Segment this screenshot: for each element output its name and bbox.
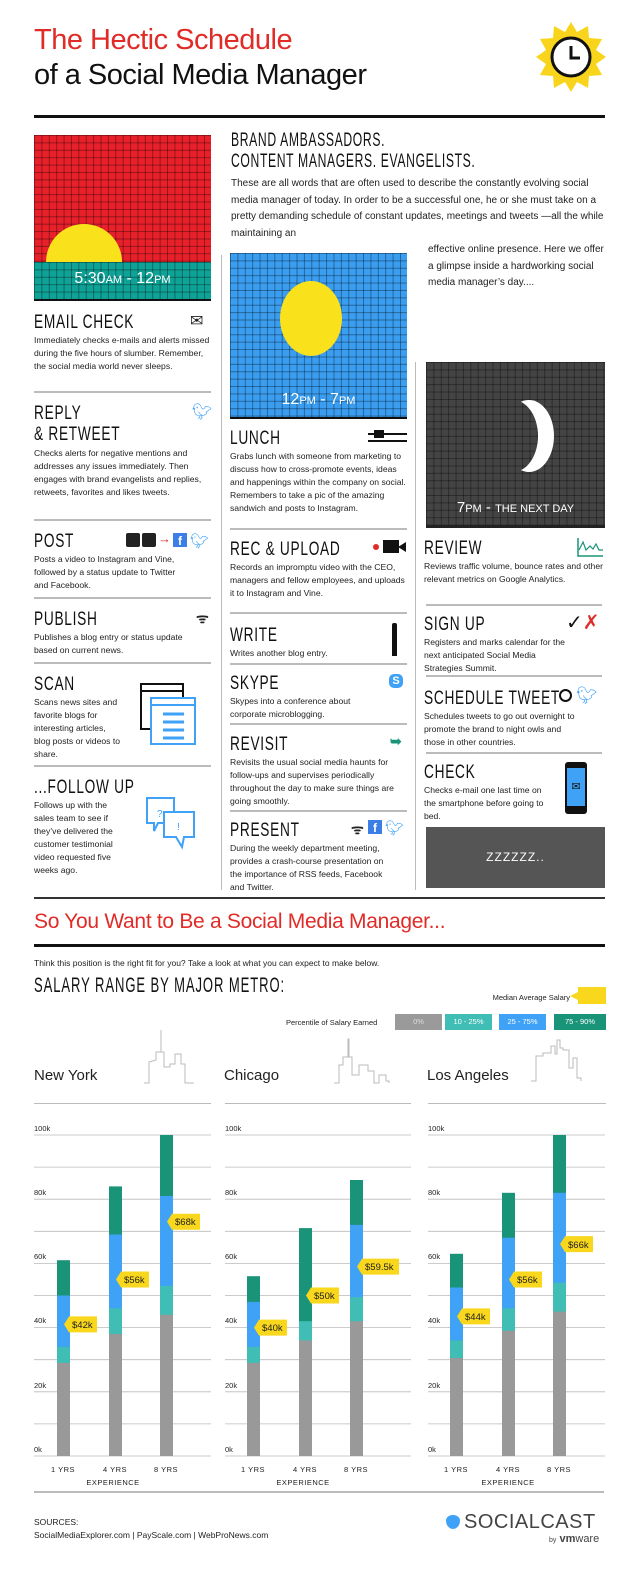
bar charts: 8 YRS	[344, 1465, 368, 1474]
icon: speech bubbles: ?	[157, 809, 163, 820]
item: review	[424, 538, 603, 584]
item: write: Writes another blog entry.	[230, 648, 328, 658]
item: post	[34, 531, 209, 590]
bar charts: 40k	[428, 1316, 440, 1325]
item: schedule tweet: SCHEDULE TWEET	[424, 688, 560, 709]
item: sign up: ✓✗	[566, 612, 600, 634]
item: check: Checks e-mail one last time on the smartphone before going to bed.	[424, 785, 543, 821]
sources	[34, 1517, 268, 1540]
item: follow up: Follows up with the sales team to see if they’ve delivered the customer testimonial video requested five weeks ago.	[34, 800, 113, 875]
bar charts: 0k	[428, 1445, 436, 1454]
item: email check: ✉	[190, 313, 203, 330]
Chicago bars	[247, 1180, 363, 1456]
item: rec & upload: Records an impromptu video with the CEO, managers and fellow employees, and uploads it to Instagram and Vine.	[230, 562, 405, 598]
item: review: Reviews traffic volume, bounce rates and other relevant metrics on Google Analytics.	[424, 561, 603, 584]
item: skype: Skypes into a conference about corporate microblogging.	[230, 696, 350, 719]
bar charts: EXPERIENCE	[276, 1478, 330, 1487]
item: rec & upload: REC & UPLOAD	[230, 539, 341, 560]
panel: morning: 5:30AM - 12PM	[74, 270, 171, 287]
item: email check	[34, 312, 209, 371]
bar charts: 40k	[34, 1316, 46, 1325]
item: reply & retweet: 🐦︎	[192, 404, 212, 421]
bar charts: 1 YRS	[444, 1465, 468, 1474]
panel: night: 7PM - THE NEXT DAY	[457, 499, 574, 516]
bar charts: 20k	[225, 1381, 237, 1390]
item: schedule tweet	[424, 686, 598, 747]
item: check	[424, 762, 587, 821]
text: effective online presence. Here we offer a glimpse inside a hardworking social media manager’s day....	[428, 244, 604, 288]
item: skype	[230, 673, 403, 719]
bar charts: EXPERIENCE	[86, 1478, 140, 1487]
bar charts: 4 YRS	[496, 1465, 520, 1474]
item: publish: PUBLISH	[34, 609, 98, 630]
item: follow up: ...FOLLOW UP	[34, 777, 135, 798]
section title: So You Want to Be a Social Media Manager...	[34, 910, 445, 933]
bar charts: 60k	[34, 1252, 46, 1261]
icon: speech bubbles: !	[177, 822, 180, 833]
bar charts	[34, 1124, 605, 1493]
bar charts: 4 YRS	[103, 1465, 127, 1474]
legend: 10 - 25%	[453, 1017, 484, 1026]
title	[34, 24, 367, 91]
panel: morning	[34, 135, 211, 301]
bar charts: 40k	[225, 1316, 237, 1325]
intro text: These are all words that are often used to describe the constantly evolving social media manager of today. In order to be a successful one, he or she must take on a pretty demanding schedule of constant updates, meetings and tweets —all the while maintaining an	[231, 178, 603, 238]
bar charts: 80k	[428, 1188, 440, 1197]
item: publish: ᯤ	[196, 610, 209, 626]
bar charts: 1 YRS	[51, 1465, 75, 1474]
item: skype: S	[392, 675, 400, 687]
bar charts: $68k	[175, 1217, 196, 1228]
logo: socialcast: by vmware	[549, 1533, 599, 1545]
bar charts: $56k	[517, 1275, 538, 1286]
city headers: New York	[34, 1067, 97, 1084]
legend: Percentile of Salary Earned	[286, 1018, 377, 1027]
bar charts: 20k	[428, 1381, 440, 1390]
title: The Hectic Schedule	[34, 24, 292, 56]
median labels	[64, 1214, 593, 1336]
sources: SocialMediaExplorer.com | PayScale.com | WebProNews.com	[34, 1530, 268, 1540]
item: revisit	[230, 733, 402, 806]
bar charts: 0k	[34, 1445, 42, 1454]
item: post: Posts a video to Instagram and Vine, followed by a status update to Twitter and Facebook.	[34, 554, 175, 590]
bar charts: 0k	[225, 1445, 233, 1454]
item: lunch: Grabs lunch with someone from marketing to discuss how to cross-promote events, ideas and happenings within the company on social. Remembers to take a pic of the amazing sandwich and posts to Instagram.	[230, 451, 406, 513]
icon: browser windows	[140, 683, 196, 745]
item: sign up: Registers and marks calendar for the next anticipated Social Media Strategies Summit.	[424, 637, 565, 673]
bar charts: 80k	[34, 1188, 46, 1197]
panel: zzzzz	[426, 827, 605, 888]
bar charts: 100k	[428, 1124, 445, 1133]
bar charts: 4 YRS	[293, 1465, 317, 1474]
item: post: →	[158, 531, 171, 546]
item: rec & upload	[230, 539, 406, 598]
item: reply & retweet: Checks alerts for negative mentions and addresses any issues immediately. Then engages with brand evangelists and replies, retweets, favorites and likes tweets.	[34, 448, 201, 497]
panel: zzzzz: ZZZZZZ..	[486, 850, 545, 864]
item: write	[230, 623, 397, 658]
bar charts: EXPERIENCE	[481, 1478, 535, 1487]
bar charts: 20k	[34, 1381, 46, 1390]
bar charts: 1 YRS	[241, 1465, 265, 1474]
New York bars	[57, 1135, 173, 1456]
legend: 75 - 90%	[565, 1017, 595, 1026]
icon: speech bubbles	[146, 797, 195, 850]
logo: socialcast: SOCIALCAST	[464, 1511, 596, 1533]
item: email check: Immediately checks e-mails and alerts missed during the five hours of slumber. Remember, the social media world never sleeps.	[34, 335, 209, 371]
item: reply & retweet: & RETWEET	[34, 424, 120, 445]
Los Angeles bars	[450, 1135, 566, 1456]
salary heading: SALARY RANGE BY MAJOR METRO:	[34, 974, 285, 997]
item: sign up: SIGN UP	[424, 614, 485, 635]
panel: afternoon: 12PM - 7PM	[282, 391, 355, 408]
city headers: Chicago	[224, 1067, 279, 1084]
logo: socialcast	[446, 1511, 599, 1545]
intro line: Think this position is the right fit for you? Take a look at what you can expect to make below.	[34, 958, 379, 968]
item: present	[230, 820, 404, 892]
item: schedule tweet: Schedules tweets to go out overnight to promote the brand to night owls and those in other countries.	[424, 711, 574, 747]
legend	[286, 987, 606, 1030]
item: publish	[34, 609, 209, 655]
legend: Median Average Salary	[493, 993, 570, 1002]
bar charts: 8 YRS	[154, 1465, 178, 1474]
item: review: REVIEW	[424, 538, 482, 559]
intro heading: BRAND AMBASSADORS.	[231, 130, 385, 151]
item: revisit: Revisits the usual social media haunts for follow-ups and supervises periodically throughout the day to make sure things are going smoothly.	[230, 757, 394, 806]
item: publish: Publishes a blog entry or status update based on current news.	[34, 632, 183, 655]
item: scan	[34, 674, 196, 759]
item: reply & retweet: REPLY	[34, 403, 81, 424]
item: post: f	[178, 534, 182, 548]
bar charts: $56k	[124, 1275, 145, 1286]
icon: clock sun	[536, 22, 606, 92]
city headers	[34, 1030, 606, 1104]
sources: SOURCES:	[34, 1517, 78, 1527]
panel: afternoon	[230, 253, 407, 419]
bar charts: $40k	[262, 1323, 283, 1334]
bar charts: $59.5k	[365, 1262, 394, 1273]
item: lunch: LUNCH	[230, 428, 281, 449]
bar charts: 100k	[225, 1124, 242, 1133]
bar charts: 100k	[34, 1124, 51, 1133]
item: check: ✉	[571, 781, 581, 793]
bar charts: $42k	[72, 1320, 93, 1331]
item: sign up	[424, 612, 600, 673]
panel: night	[426, 362, 605, 528]
item: post: 🐦︎	[190, 533, 209, 550]
legend: 0%	[413, 1017, 424, 1026]
item: present: PRESENT	[230, 820, 300, 841]
item: post: POST	[34, 531, 74, 552]
title: of a Social Media Manager	[34, 59, 366, 91]
bar charts: 60k	[428, 1252, 440, 1261]
item: present: ᯤ	[351, 821, 364, 837]
item: present: f	[373, 821, 377, 835]
item: revisit: REVISIT	[230, 734, 288, 755]
city headers: Los Angeles	[427, 1067, 509, 1084]
item: reply & retweet	[34, 403, 212, 497]
item: revisit: ➥	[390, 733, 402, 749]
bar charts: 60k	[225, 1252, 237, 1261]
bar charts: 8 YRS	[547, 1465, 571, 1474]
legend: 25 - 75%	[507, 1017, 538, 1026]
item: present: 🐦︎	[385, 820, 404, 837]
item: scan: Scans news sites and favorite blogs for interesting articles, blog posts or videos to share.	[34, 697, 120, 759]
intro heading: CONTENT MANAGERS. EVANGELISTS.	[231, 151, 475, 172]
item: follow up	[34, 777, 195, 875]
item: skype: SKYPE	[230, 673, 279, 694]
bar charts: $44k	[465, 1312, 486, 1323]
item: email check: EMAIL CHECK	[34, 312, 134, 333]
bar charts: $66k	[568, 1240, 589, 1251]
item: schedule tweet: 🐦︎	[576, 686, 598, 705]
item: write: WRITE	[230, 625, 278, 646]
bar charts: $50k	[314, 1291, 335, 1302]
item: scan: SCAN	[34, 674, 75, 695]
item: check: CHECK	[424, 762, 475, 783]
bar charts: 80k	[225, 1188, 237, 1197]
item: present: During the weekly department meeting, provides a crash-course presentation on the importance of RSS feeds, Facebook and Twitter.	[230, 843, 383, 892]
intro heading	[231, 130, 475, 172]
